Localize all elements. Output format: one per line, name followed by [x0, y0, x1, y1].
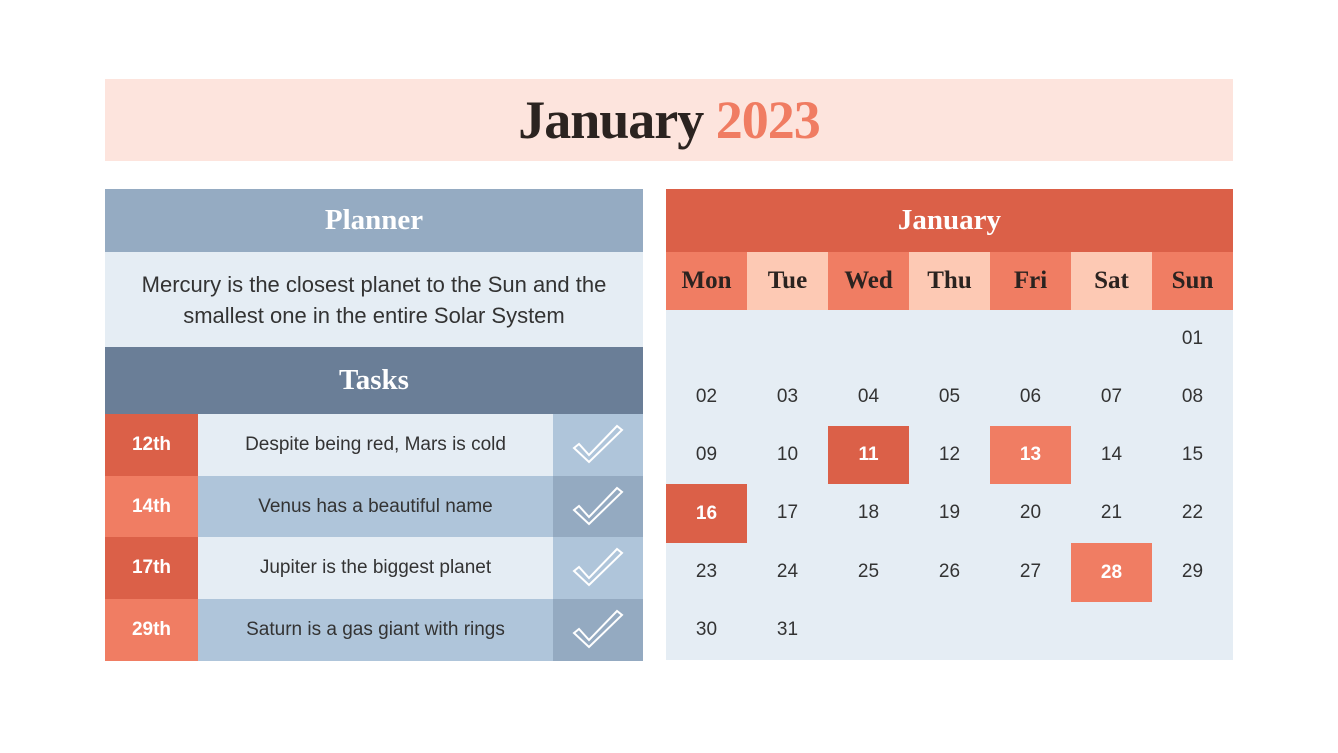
task rows: Venus has a beautiful name [258, 496, 493, 516]
date grid: 18 [858, 502, 879, 523]
date grid: 09 [696, 444, 717, 465]
date grid: 31 [777, 619, 798, 640]
date grid: 02 [696, 386, 717, 407]
planner description: smallest one in the entire Solar System [183, 302, 565, 328]
tasks header [105, 347, 643, 414]
task rows: Jupiter is the biggest planet [260, 557, 491, 578]
task rows: 14th [132, 496, 171, 516]
planner description: Mercury is the closest planet to the Sun and the [142, 272, 606, 296]
date grid: 14 [1101, 444, 1122, 465]
date grid: 04 [858, 386, 879, 407]
weekday row: Sat [1094, 267, 1129, 294]
weekday row: Mon [682, 267, 732, 294]
date grid: 26 [939, 561, 960, 582]
date grid: 22 [1182, 502, 1203, 523]
date grid: 23 [696, 561, 717, 582]
planner header: Planner [325, 204, 423, 236]
date grid: 12 [939, 444, 960, 465]
date grid: 06 [1020, 386, 1041, 407]
date grid: 03 [777, 386, 798, 407]
planner header [105, 189, 643, 252]
date grid: 07 [1101, 386, 1122, 407]
planner description [105, 252, 643, 347]
task rows: Despite being red, Mars is cold [245, 434, 506, 455]
task rows: Saturn is a gas giant with rings [246, 619, 505, 640]
weekday row: Fri [1014, 267, 1047, 294]
date grid: 15 [1182, 444, 1203, 465]
title banner [105, 79, 1233, 161]
date grid: 01 [1182, 328, 1203, 349]
task rows [105, 414, 643, 661]
task rows: 17th [132, 557, 171, 578]
panel: calendar [666, 189, 1233, 660]
date grid: 19 [939, 502, 960, 523]
calendar header [666, 189, 1233, 252]
calendar header: January [898, 204, 1001, 236]
weekday row: Tue [768, 267, 807, 294]
date grid: 13 [1020, 444, 1041, 465]
weekday row: Thu [927, 267, 972, 294]
task rows: 12th [132, 434, 171, 455]
weekday row: Wed [844, 267, 893, 294]
panel: planner [105, 189, 643, 661]
date grid: 05 [939, 386, 960, 407]
date grid: 17 [777, 502, 798, 523]
date grid: 16 [696, 502, 717, 524]
title banner: January [518, 90, 703, 150]
date grid: 24 [777, 561, 798, 582]
weekday row [666, 252, 1233, 310]
date grid: 10 [777, 444, 798, 465]
date grid: 28 [1101, 562, 1122, 582]
date grid: 20 [1020, 502, 1041, 523]
tasks header: Tasks [339, 364, 409, 396]
title banner: 2023 [716, 90, 820, 150]
date grid: 29 [1182, 561, 1203, 582]
date grid: 11 [858, 444, 879, 465]
date grid: 30 [696, 619, 717, 640]
date grid: 27 [1020, 561, 1041, 582]
date grid: 25 [858, 561, 879, 582]
date grid [666, 328, 1203, 640]
weekday row: Sun [1172, 267, 1213, 294]
task rows: 29th [132, 619, 171, 640]
date grid: 21 [1101, 502, 1122, 523]
date grid: 08 [1182, 386, 1203, 407]
